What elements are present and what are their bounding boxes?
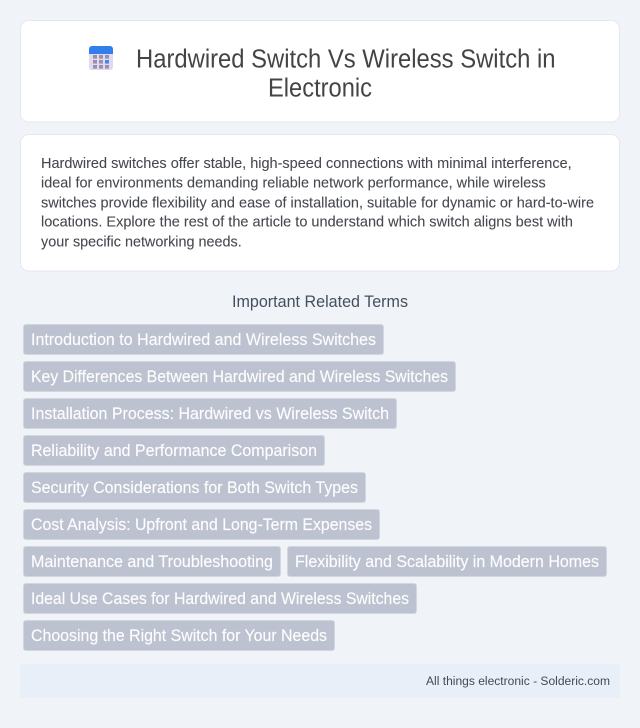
list: related term tags xyxy=(24,324,606,650)
tag: use cases xyxy=(24,584,416,614)
tag: introduction xyxy=(24,324,384,354)
text block: introduction xyxy=(41,156,594,250)
panel: introduction xyxy=(20,134,620,271)
tag: security xyxy=(24,472,366,502)
title xyxy=(136,46,556,102)
tag: flexibility xyxy=(288,546,606,576)
tag: installation xyxy=(24,398,396,428)
tag: choosing: Choosing the Right Switch for Your Needs xyxy=(31,626,327,645)
tag: flexibility: Flexibility and Scalability in Modern Homes xyxy=(295,552,599,571)
footer: All things electronic - Solderic.com xyxy=(426,674,610,688)
tag: choosing xyxy=(24,620,334,650)
tag: reliability: Reliability and Performance Comparison xyxy=(31,441,317,460)
tag: key differences: Key Differences Between Hardwired and Wireless Switches xyxy=(31,367,448,386)
text block: introduction: Hardwired switches offer stable, high-speed connections with minimal interference, xyxy=(41,156,572,172)
tag: cost xyxy=(24,510,380,540)
tag: cost: Cost Analysis: Upfront and Long-Term Expenses xyxy=(31,515,372,534)
tag: reliability xyxy=(24,436,324,466)
title: Hardwired Switch Vs Wireless Switch in xyxy=(136,46,556,74)
text block: introduction: locations. Explore the rest of the article to understand which switch aligns best with xyxy=(41,214,573,230)
heading: important related terms: Important Related Terms xyxy=(232,293,408,311)
title: Electronic xyxy=(268,74,372,102)
text block: introduction: ideal for environments demanding reliable network performance, while wireless xyxy=(41,176,546,192)
tag: use cases: Ideal Use Cases for Hardwired and Wireless Switches xyxy=(31,589,409,608)
tag: maintenance xyxy=(24,546,280,576)
tag: security: Security Considerations for Both Switch Types xyxy=(31,478,358,497)
tag: maintenance: Maintenance and Troubleshooting xyxy=(31,552,273,571)
footer xyxy=(20,664,620,698)
panel: title card xyxy=(20,20,620,122)
tag: introduction: Introduction to Hardwired and Wireless Switches xyxy=(31,330,376,349)
tag: installation: Installation Process: Hardwired vs Wireless Switch xyxy=(31,404,389,423)
text block: introduction: switches provide flexibility and ease of installation, suitable for dynamic or hard-to-wire xyxy=(41,196,594,212)
icon: calendar xyxy=(89,46,113,70)
tag: key differences xyxy=(24,362,456,392)
text block: introduction: your specific networking needs. xyxy=(41,234,242,250)
